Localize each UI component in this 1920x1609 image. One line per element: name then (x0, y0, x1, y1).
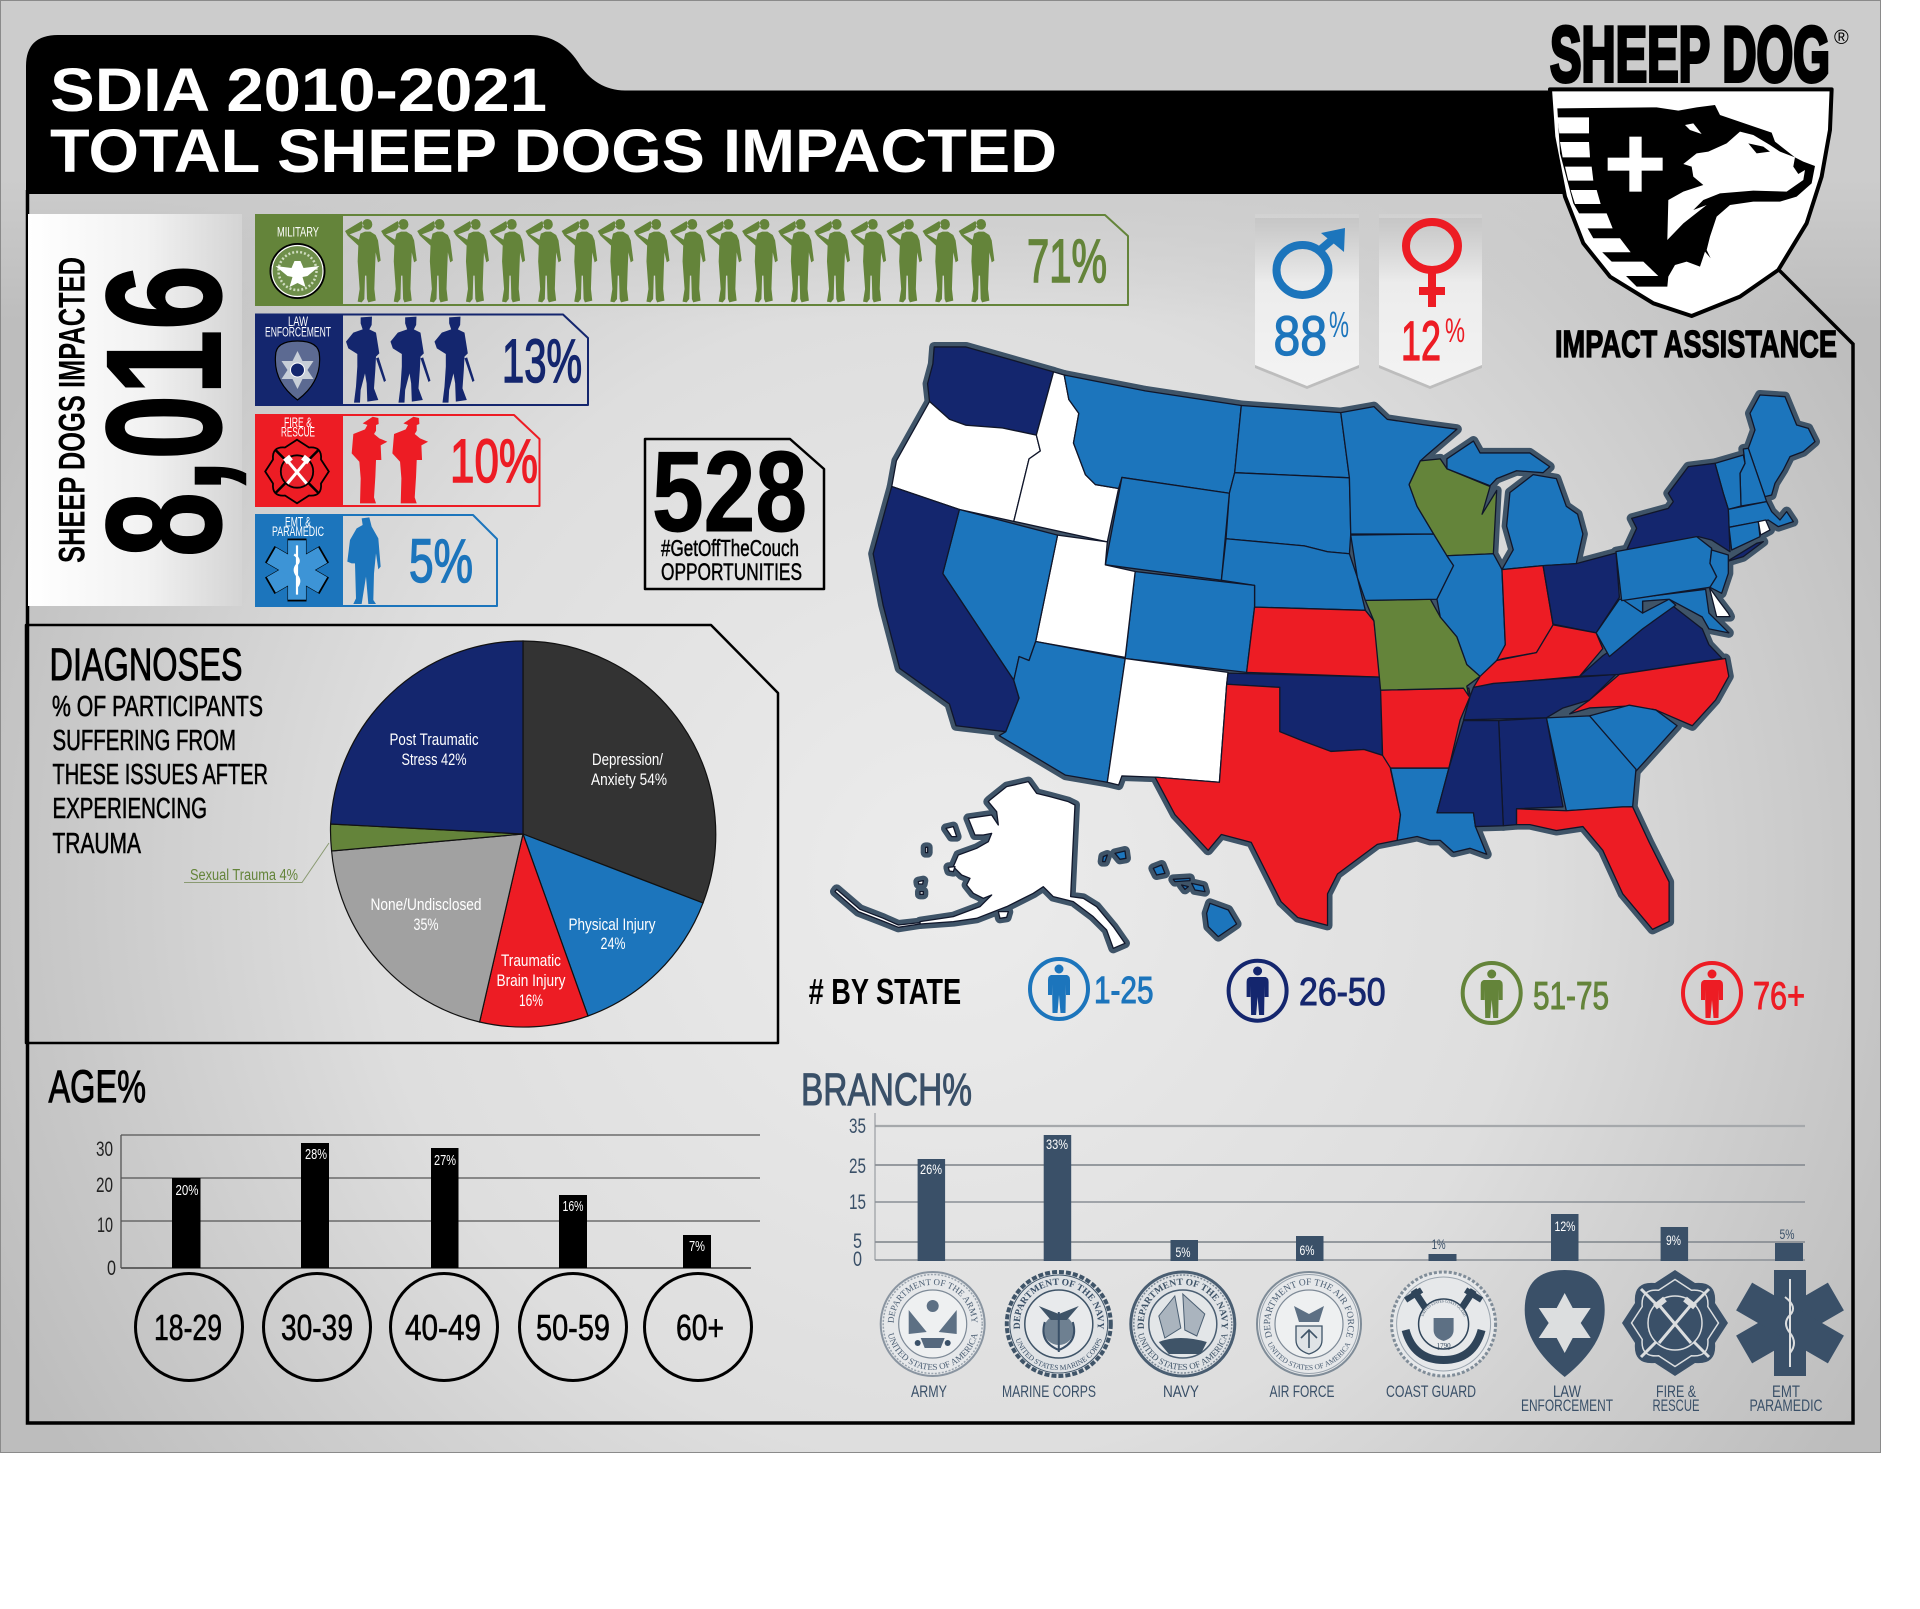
state: Vermont (1715, 455, 1745, 509)
state: Maryland (1623, 589, 1729, 633)
chart: branch bars: 6% (1300, 1242, 1314, 1258)
chart: branch bars: 0 (853, 1248, 862, 1271)
banner: female 12%: % (1445, 312, 1465, 350)
icon: marine corps seal: DEPARTMENT OF THE NAVY (1014, 1278, 1104, 1330)
state: Missouri (1365, 599, 1480, 696)
state: Maine (1748, 395, 1815, 497)
seal labels: ENFORCEMENT (1521, 1396, 1613, 1415)
icon: navy seal: UNITED STATES OF AMERICA (1138, 1332, 1228, 1370)
pie labels: None/Undisclosed (370, 896, 482, 914)
legend: number by state: # BY STATE (809, 971, 961, 1012)
banner: female 12% (1379, 214, 1482, 389)
state: Michigan upper (1447, 441, 1550, 486)
state: Delaware (1709, 587, 1730, 617)
chart: branch bars: 15 (849, 1191, 866, 1214)
icon: air force seal: DEPARTMENT OF THE AIR FORCE (1264, 1278, 1354, 1338)
island: Lanai (1182, 885, 1188, 889)
legend item: 26-50: 26-50 (1299, 971, 1386, 1014)
legend item: 51-75 (1463, 963, 1609, 1023)
seal labels: RESCUE (1652, 1396, 1700, 1415)
icon: female symbol (1406, 222, 1458, 307)
island: Nunivak (948, 867, 955, 872)
island: Molokai (1173, 878, 1190, 882)
state: Michigan lower (1502, 475, 1583, 570)
state: Oregon (892, 402, 1040, 521)
state: Connecticut (1729, 522, 1760, 550)
icon: star of life (265, 539, 329, 601)
icon: star of life (1736, 1270, 1844, 1376)
chart: branch bars: 5% (1176, 1244, 1190, 1260)
panel: age: 40-49 (405, 1307, 481, 1348)
state: Oklahoma (1227, 673, 1383, 755)
chart: age bars: 27% (434, 1153, 456, 1169)
legend: number by state (809, 959, 1805, 1023)
state: Montana (1064, 375, 1241, 493)
legend item: 76+ (1683, 963, 1805, 1023)
state: Utah (1036, 535, 1135, 657)
state: New Hampshire (1740, 448, 1767, 506)
icon: paramedic silhouette (347, 517, 381, 604)
icon: police badge (275, 341, 320, 400)
pie labels: Traumatic (501, 952, 561, 970)
icon: coast guard seal (1390, 1270, 1498, 1378)
state: Mississippi (1437, 721, 1503, 827)
state: Long Island (1727, 542, 1763, 562)
legend item: 1-25 (1030, 959, 1154, 1019)
row: law enforcement 13%: LAW (288, 314, 308, 329)
chart: branch bars: 26% (920, 1161, 942, 1177)
icon: army seal (880, 1271, 986, 1377)
panel: diagnoses (26, 625, 778, 1043)
icon: military emblem (270, 243, 326, 299)
panel: branch (801, 1064, 1844, 1415)
chart: age bars: 0 (107, 1257, 116, 1280)
state: New Mexico (1107, 659, 1228, 785)
panel: age: 50-59 (536, 1307, 610, 1348)
seal labels: LAW (1553, 1382, 1581, 1401)
pie labels: Anxiety 54% (591, 771, 667, 789)
banner: male 88% (1255, 214, 1359, 389)
icon: army seal: UNITED STATES OF AMERICA (888, 1332, 978, 1370)
chart: age bars: 7% (689, 1239, 705, 1255)
panel: age (48, 1061, 760, 1380)
icon: law enforcement badge (1525, 1270, 1605, 1377)
state: Arizona (999, 642, 1125, 782)
icons: police officers (346, 317, 474, 403)
icons: saluting soldiers (345, 219, 994, 302)
chart: diagnoses pie (330, 641, 716, 1027)
state: Idaho (1014, 372, 1119, 542)
state: Illinois (1437, 554, 1505, 676)
row: military 71%: 71% (1027, 227, 1107, 295)
state: Iowa (1351, 534, 1454, 600)
title (50, 56, 1057, 185)
island: Niihau (1103, 855, 1107, 862)
state: Alaska (920, 782, 1125, 948)
seal labels: ARMY (911, 1382, 947, 1401)
label: sheep dogs impacted: SHEEP DOGS IMPACTED (52, 257, 92, 563)
header banner (26, 35, 1575, 194)
row: EMT and paramedic 5%: EMT & (285, 515, 311, 530)
icon: air force seal (1256, 1271, 1362, 1377)
chart: age bars (96, 1135, 760, 1280)
row: military 71% (255, 214, 1128, 306)
state: Ohio (1543, 553, 1619, 633)
seal labels: EMT (1772, 1382, 1800, 1401)
icon: navy seal (1129, 1270, 1236, 1378)
panel: branch: BRANCH% (801, 1064, 972, 1115)
seal labels: MARINE CORPS (1002, 1382, 1096, 1401)
pie labels: 24% (600, 935, 626, 953)
island: St Lawrence (946, 827, 957, 837)
row: EMT and paramedic 5% (255, 514, 497, 607)
state: Virginia (1580, 603, 1722, 676)
icon: marine corps seal: UNITED STATES MARINE CORPS (1016, 1338, 1102, 1370)
chart: age bars: 16% (562, 1199, 584, 1215)
island: Maui (1192, 883, 1205, 892)
state: South Dakota (1226, 473, 1351, 554)
age labels (136, 1274, 752, 1380)
title: SDIA 2010-2021 (50, 56, 547, 124)
logo: Sheep Dog Impact Assistance (1550, 10, 1849, 366)
seal labels: AIR FORCE (1270, 1382, 1334, 1401)
icon: army seal: DEPARTMENT OF THE ARMY (888, 1279, 978, 1323)
banner: male 88%: % (1329, 304, 1349, 345)
row: law enforcement 13%: 13% (502, 327, 582, 395)
icon: maltese cross (265, 440, 329, 503)
seal labels: COAST GUARD (1386, 1382, 1476, 1401)
pie labels: Brain Injury (496, 972, 566, 990)
islands: Pribilof (918, 881, 923, 884)
state: Florida (1517, 807, 1669, 929)
outer frame (28, 190, 1853, 1423)
state: Minnesota (1341, 407, 1457, 534)
icon: marine corps seal (1004, 1270, 1113, 1378)
state: Washington (928, 347, 1054, 435)
state: Alabama (1499, 718, 1563, 826)
state: Texas (1155, 684, 1400, 925)
chart: branch bars: 33% (1046, 1136, 1068, 1152)
callout: sexual trauma (184, 843, 329, 884)
icons: firefighters (352, 417, 428, 503)
chart: branch bars: 25 (849, 1155, 866, 1178)
state: New Jersey (1710, 550, 1728, 593)
panel: age: 60+ (676, 1307, 724, 1348)
panel: age: AGE% (48, 1061, 146, 1112)
seal labels: PARAMEDIC (1750, 1396, 1822, 1415)
icon: navy seal: DEPARTMENT OF THE NAVY (1138, 1278, 1228, 1330)
chart: age bars: 28% (305, 1147, 327, 1163)
state: Hawaii big island (1207, 903, 1237, 937)
legend item: 1-25: 1-25 (1094, 970, 1154, 1012)
state: Georgia (1546, 716, 1636, 811)
state: Massachusetts (1728, 502, 1793, 527)
legend item: 26-50 (1229, 961, 1386, 1021)
row: fire and rescue 10%: 10% (450, 427, 538, 495)
island: St Matthew (926, 847, 928, 853)
row: fire and rescue 10%: FIRE & (284, 415, 312, 430)
chart: age bars: 10 (97, 1214, 113, 1237)
state: New York (1627, 463, 1730, 552)
chart: age bars: 30 (96, 1138, 113, 1161)
panel: age: 30-39 (281, 1307, 353, 1348)
state: South Carolina (1590, 705, 1677, 771)
text block: description: TRAUMA (52, 828, 141, 860)
title: TOTAL SHEEP DOGS IMPACTED (50, 117, 1057, 185)
seal labels: FIRE & (1656, 1382, 1696, 1401)
row: fire and rescue 10%: RESCUE (281, 425, 315, 440)
chart: age bars: 20 (96, 1174, 113, 1197)
island: Oahu (1153, 865, 1165, 875)
chart: branch bars: 5 (853, 1230, 862, 1253)
row: fire and rescue 10% (255, 414, 540, 507)
row: law enforcement 13%: ENFORCEMENT (265, 325, 331, 340)
island: Kodiak (998, 912, 1008, 918)
banner: female 12%: 12 (1401, 309, 1441, 372)
state: California (873, 487, 1019, 732)
text block: description: SUFFERING FROM (52, 725, 236, 757)
islands: Aleutians (835, 889, 920, 927)
text block: description: EXPERIENCING (52, 793, 207, 825)
heading: diagnoses: DIAGNOSES (50, 639, 242, 690)
state: Kentucky (1473, 625, 1603, 687)
state: Arkansas (1381, 688, 1470, 768)
callout: sexual trauma: Sexual Trauma 4% (190, 867, 298, 884)
panel: total impacted (28, 214, 255, 606)
pie labels (370, 731, 667, 1010)
row: military 71%: MILITARY (277, 224, 319, 240)
row: EMT and paramedic 5%: 5% (409, 527, 473, 595)
state: Pennsylvania (1616, 537, 1717, 601)
state: Indiana (1497, 566, 1553, 661)
logo: Sheep Dog Impact Assistance: ® (1834, 27, 1849, 49)
number: 8,016: 8,016 (72, 265, 255, 557)
legend item: 51-75: 51-75 (1533, 975, 1609, 1018)
chart: branch bars (849, 1113, 1805, 1271)
callout: 528 opportunities: 528 (652, 429, 807, 556)
chart: age bars: 20% (176, 1183, 199, 1199)
icon: coast guard seal: 1790 (1437, 1342, 1451, 1350)
state: Louisiana (1391, 768, 1487, 854)
pie labels: Depression/ (592, 751, 663, 769)
state: Wyoming (1105, 477, 1229, 580)
chart: branch bars: 35 (849, 1115, 866, 1138)
text block: description: THESE ISSUES AFTER (52, 759, 268, 791)
icon: coast guard seal: UNITED STATES COAST GUARD (1421, 1300, 1466, 1316)
seal labels: NAVY (1163, 1382, 1199, 1401)
chart: branch bars: 5% (1780, 1226, 1794, 1242)
pie labels: 16% (519, 992, 543, 1010)
pie labels: Post Traumatic (390, 731, 478, 749)
island: Kauai (1115, 851, 1126, 859)
icon: male symbol (1276, 233, 1340, 295)
state: North Carolina (1570, 659, 1729, 726)
text block: description: % OF PARTICIPANTS (52, 691, 263, 723)
legend item: 76+: 76+ (1753, 975, 1805, 1018)
row: EMT and paramedic 5%: PARAMEDIC (272, 524, 324, 539)
state: Rhode Island (1758, 520, 1770, 535)
pie labels: Stress 42% (402, 751, 467, 769)
state: Kansas (1247, 607, 1381, 677)
row: law enforcement 13% (255, 314, 588, 406)
chart: branch bars: 9% (1666, 1232, 1681, 1248)
pie labels: Physical Injury (568, 916, 656, 934)
state: Nevada (943, 509, 1058, 680)
text block: description (52, 691, 268, 860)
panel: age: 18-29 (154, 1307, 222, 1348)
icon: shield with sheepdog head (1550, 89, 1832, 316)
chart: branch bars: 1% (1432, 1236, 1446, 1252)
chart: branch bars: 12% (1554, 1218, 1576, 1234)
state: North Dakota (1235, 405, 1349, 478)
callout: 528 opportunities: #GetOffTheCouch (661, 535, 799, 561)
state: West Virginia (1596, 599, 1676, 657)
seal labels (911, 1382, 1822, 1415)
state: Nebraska (1221, 539, 1365, 610)
banner: male 88%: 88 (1274, 304, 1327, 367)
state: Tennessee (1464, 674, 1616, 720)
callout: 528 opportunities: OPPORTUNITIES (661, 559, 802, 586)
map: US states by number of participants (835, 347, 1815, 948)
state: Wisconsin (1409, 459, 1497, 556)
state: Colorado (1125, 572, 1255, 672)
pie labels: 35% (414, 916, 439, 934)
icon: fire and rescue cross (1622, 1270, 1728, 1376)
icon: air force seal: UNITED STATES OF AMERICA (1268, 1342, 1350, 1370)
